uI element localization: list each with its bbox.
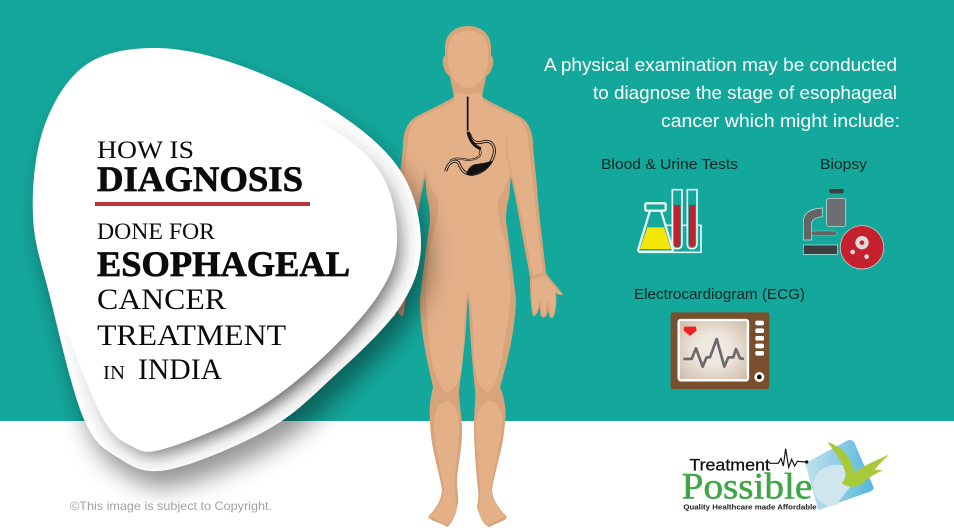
intro text: A physical examination may be conducted bbox=[544, 54, 897, 75]
icon: ecg monitor bbox=[671, 312, 769, 389]
logo tagline: Quality Healthcare made Affordable bbox=[683, 502, 817, 511]
blob inner cast shadow bbox=[70, 126, 415, 469]
intro text bbox=[544, 54, 900, 131]
arm crease right bbox=[506, 135, 511, 172]
heading bbox=[95, 137, 350, 386]
heading line: esophageal: ESOPHAGEAL bbox=[97, 244, 350, 284]
label: electrocardiogram: Electrocardiogram (ECG) bbox=[634, 286, 805, 303]
label: blood and urine tests: Blood & Urine Tests bbox=[601, 156, 738, 173]
body highlight: torso, arms and thighs bbox=[393, 92, 543, 392]
heading line: treatment: TREATMENT bbox=[97, 319, 286, 352]
red divider bbox=[95, 202, 310, 206]
right hand bbox=[532, 276, 561, 316]
blob inner face bbox=[47, 69, 397, 452]
logo bird bbox=[827, 442, 889, 487]
heading line: in: IN bbox=[103, 362, 125, 384]
body highlight: right calf and foot bbox=[476, 401, 505, 525]
heading line: cancer: CANCER bbox=[97, 283, 226, 316]
blob outer ring bbox=[33, 48, 421, 471]
copyright note: ©This image is subject to Copyright. bbox=[70, 499, 272, 513]
icon: microscope and cell bbox=[803, 189, 884, 269]
body silhouette bbox=[373, 26, 563, 527]
body highlight: head bbox=[448, 31, 488, 88]
heading line: done for: DONE FOR bbox=[97, 219, 216, 244]
heading line: india: INDIA bbox=[138, 353, 222, 386]
intro text: cancer which might include: bbox=[661, 110, 900, 131]
logo word: treatment: Treatment bbox=[689, 455, 770, 474]
heading line: diagnosis: DIAGNOSIS bbox=[97, 159, 303, 199]
intro text: to diagnose the stage of esophageal bbox=[593, 82, 897, 103]
logo globe bbox=[813, 465, 854, 507]
logo pulse dot bbox=[805, 460, 808, 464]
teal background panel bbox=[0, 0, 954, 421]
human figure bbox=[373, 26, 563, 527]
body highlight: left calf and foot bbox=[430, 401, 459, 525]
icon: flask and test tubes bbox=[638, 190, 701, 252]
white blob panel bbox=[33, 48, 429, 487]
logo blue tile bbox=[805, 440, 873, 510]
heading line: how is: HOW IS bbox=[97, 137, 194, 164]
esophagus and stomach with endoscope bbox=[446, 97, 494, 175]
logo: treatment possible bbox=[682, 440, 889, 511]
blob shadow bbox=[41, 64, 429, 487]
logo pulse line bbox=[769, 449, 807, 467]
logo word: possible: Possible bbox=[682, 466, 812, 507]
label: biopsy: Biopsy bbox=[820, 156, 868, 173]
